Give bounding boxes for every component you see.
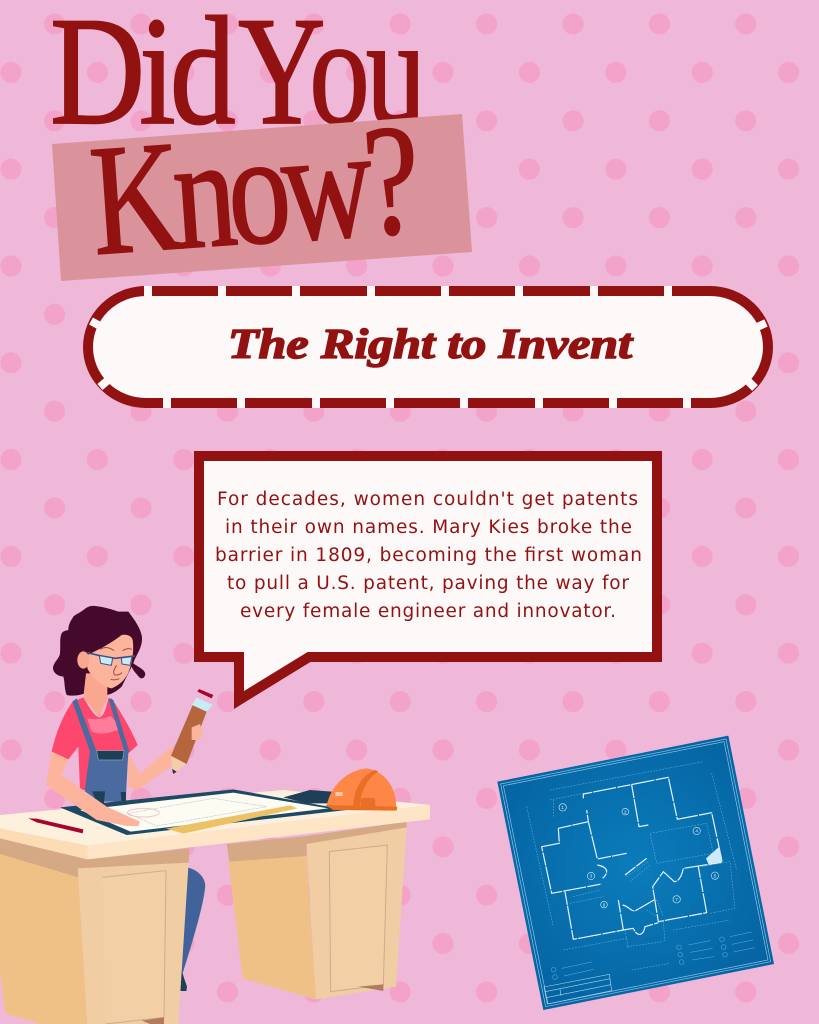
title line: Know?: Know? — [85, 91, 421, 288]
left arm — [46, 752, 140, 826]
drawing board with blueprint sheet — [60, 789, 347, 835]
hand on pencil — [192, 724, 203, 740]
room numbers — [559, 804, 719, 908]
under-top shadow right — [227, 822, 407, 862]
bubble text — [215, 489, 642, 622]
bubble text: in their own names. Mary Kies broke the — [225, 517, 632, 538]
shirt — [52, 697, 138, 790]
bubble text: to pull a U.S. patent, paving the way for — [227, 573, 629, 594]
bib pocket — [97, 751, 124, 760]
title line: Did You — [50, 0, 425, 158]
ear — [77, 651, 89, 669]
walls — [542, 777, 722, 939]
desk — [0, 790, 430, 1024]
subtitle text: The Right to Invent — [228, 322, 634, 368]
woman — [52, 606, 213, 803]
blueprint sheet — [497, 736, 774, 1010]
blueprint floor plan: 2 — [624, 809, 627, 814]
face — [87, 635, 133, 688]
left door panel — [103, 871, 166, 1024]
pencil — [171, 689, 213, 774]
hard hat — [325, 768, 397, 811]
desk top surface — [0, 790, 430, 846]
overall straps and bib — [72, 698, 129, 803]
dark cloth — [283, 790, 332, 803]
blueprint floor plan: 6 — [603, 902, 606, 907]
speech bubble — [199, 456, 657, 700]
left pedestal front — [78, 862, 189, 1024]
title: Did You Know? — [50, 0, 472, 288]
bubble text: every female engineer and innovator. — [240, 601, 616, 622]
title highlight block — [52, 114, 472, 281]
eyebrows, nose and mouth — [100, 647, 132, 680]
title block — [544, 974, 612, 1004]
illustration: woman engineer at desk — [0, 606, 430, 1024]
thin plan details — [527, 762, 737, 970]
blueprint floor plan: 1 — [561, 805, 564, 810]
under-top shadow left — [0, 838, 189, 877]
legend lines — [551, 932, 755, 979]
blueprint floor plan: 5 — [714, 873, 717, 878]
left pedestal side — [0, 853, 87, 1024]
woman's leg — [180, 867, 205, 991]
neck — [83, 673, 107, 717]
sheet border lines — [501, 739, 771, 1007]
desk front edge — [87, 805, 430, 859]
right arm — [128, 747, 180, 790]
right door panel — [329, 845, 387, 992]
ruler — [166, 805, 297, 834]
right pedestal side — [228, 856, 316, 999]
bubble text: barrier in 1809, becoming the first woman — [215, 545, 642, 566]
subtitle pill: The Right to Invent — [88, 286, 768, 408]
blueprint floor plan: 3 — [590, 874, 593, 879]
blueprint floor plan: 4 — [695, 829, 698, 834]
blueprint floor plan — [497, 736, 774, 1010]
right pedestal front — [307, 827, 407, 999]
blueprint floor plan: 7 — [675, 897, 678, 902]
desk left edge — [0, 828, 87, 859]
waist pockets — [92, 791, 105, 803]
tiled corner — [706, 847, 723, 864]
red pen — [28, 818, 83, 833]
shirt stripe — [87, 716, 122, 734]
bubble text: For decades, women couldn't get patents — [217, 489, 638, 510]
glasses — [87, 653, 135, 665]
hair — [53, 606, 145, 696]
